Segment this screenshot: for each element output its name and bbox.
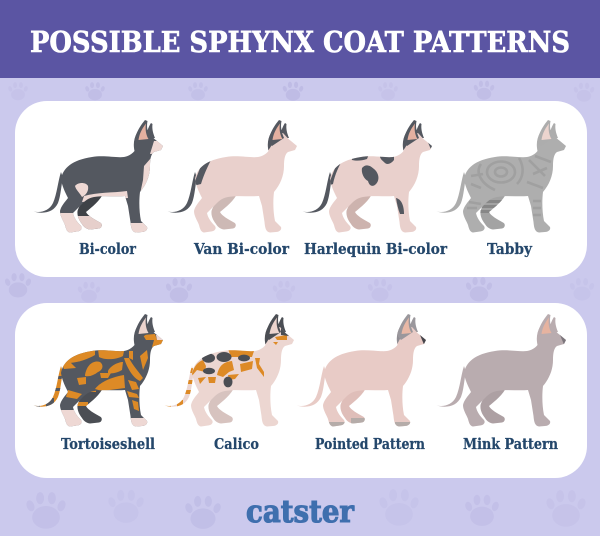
label: Tortoiseshell: Tortoiseshell [61, 435, 155, 453]
logo: catster: catster [246, 494, 355, 530]
label: Pointed Pattern: Pointed Pattern [315, 435, 425, 453]
cat: van bi-color [168, 120, 297, 232]
label: Tabby: Tabby [487, 240, 533, 258]
header banner [0, 0, 600, 78]
cat: tabby [436, 120, 566, 232]
label: Harlequin Bi-color: Harlequin Bi-color [304, 240, 448, 258]
cat: mink pattern [436, 314, 569, 426]
label: Calico: Calico [214, 435, 259, 453]
label: Bi-color: Bi-color [79, 240, 137, 258]
panel: top row [15, 101, 587, 277]
cat: bi-color [34, 120, 165, 235]
panel: bottom row [15, 303, 587, 478]
cat: calico [163, 314, 294, 426]
cat: harlequin bi-color [302, 120, 435, 232]
cat: pointed pattern [296, 314, 429, 430]
cat: tortoiseshell [32, 314, 165, 428]
label: Van Bi-color: Van Bi-color [193, 240, 290, 258]
label: Mink Pattern: Mink Pattern [463, 435, 558, 453]
